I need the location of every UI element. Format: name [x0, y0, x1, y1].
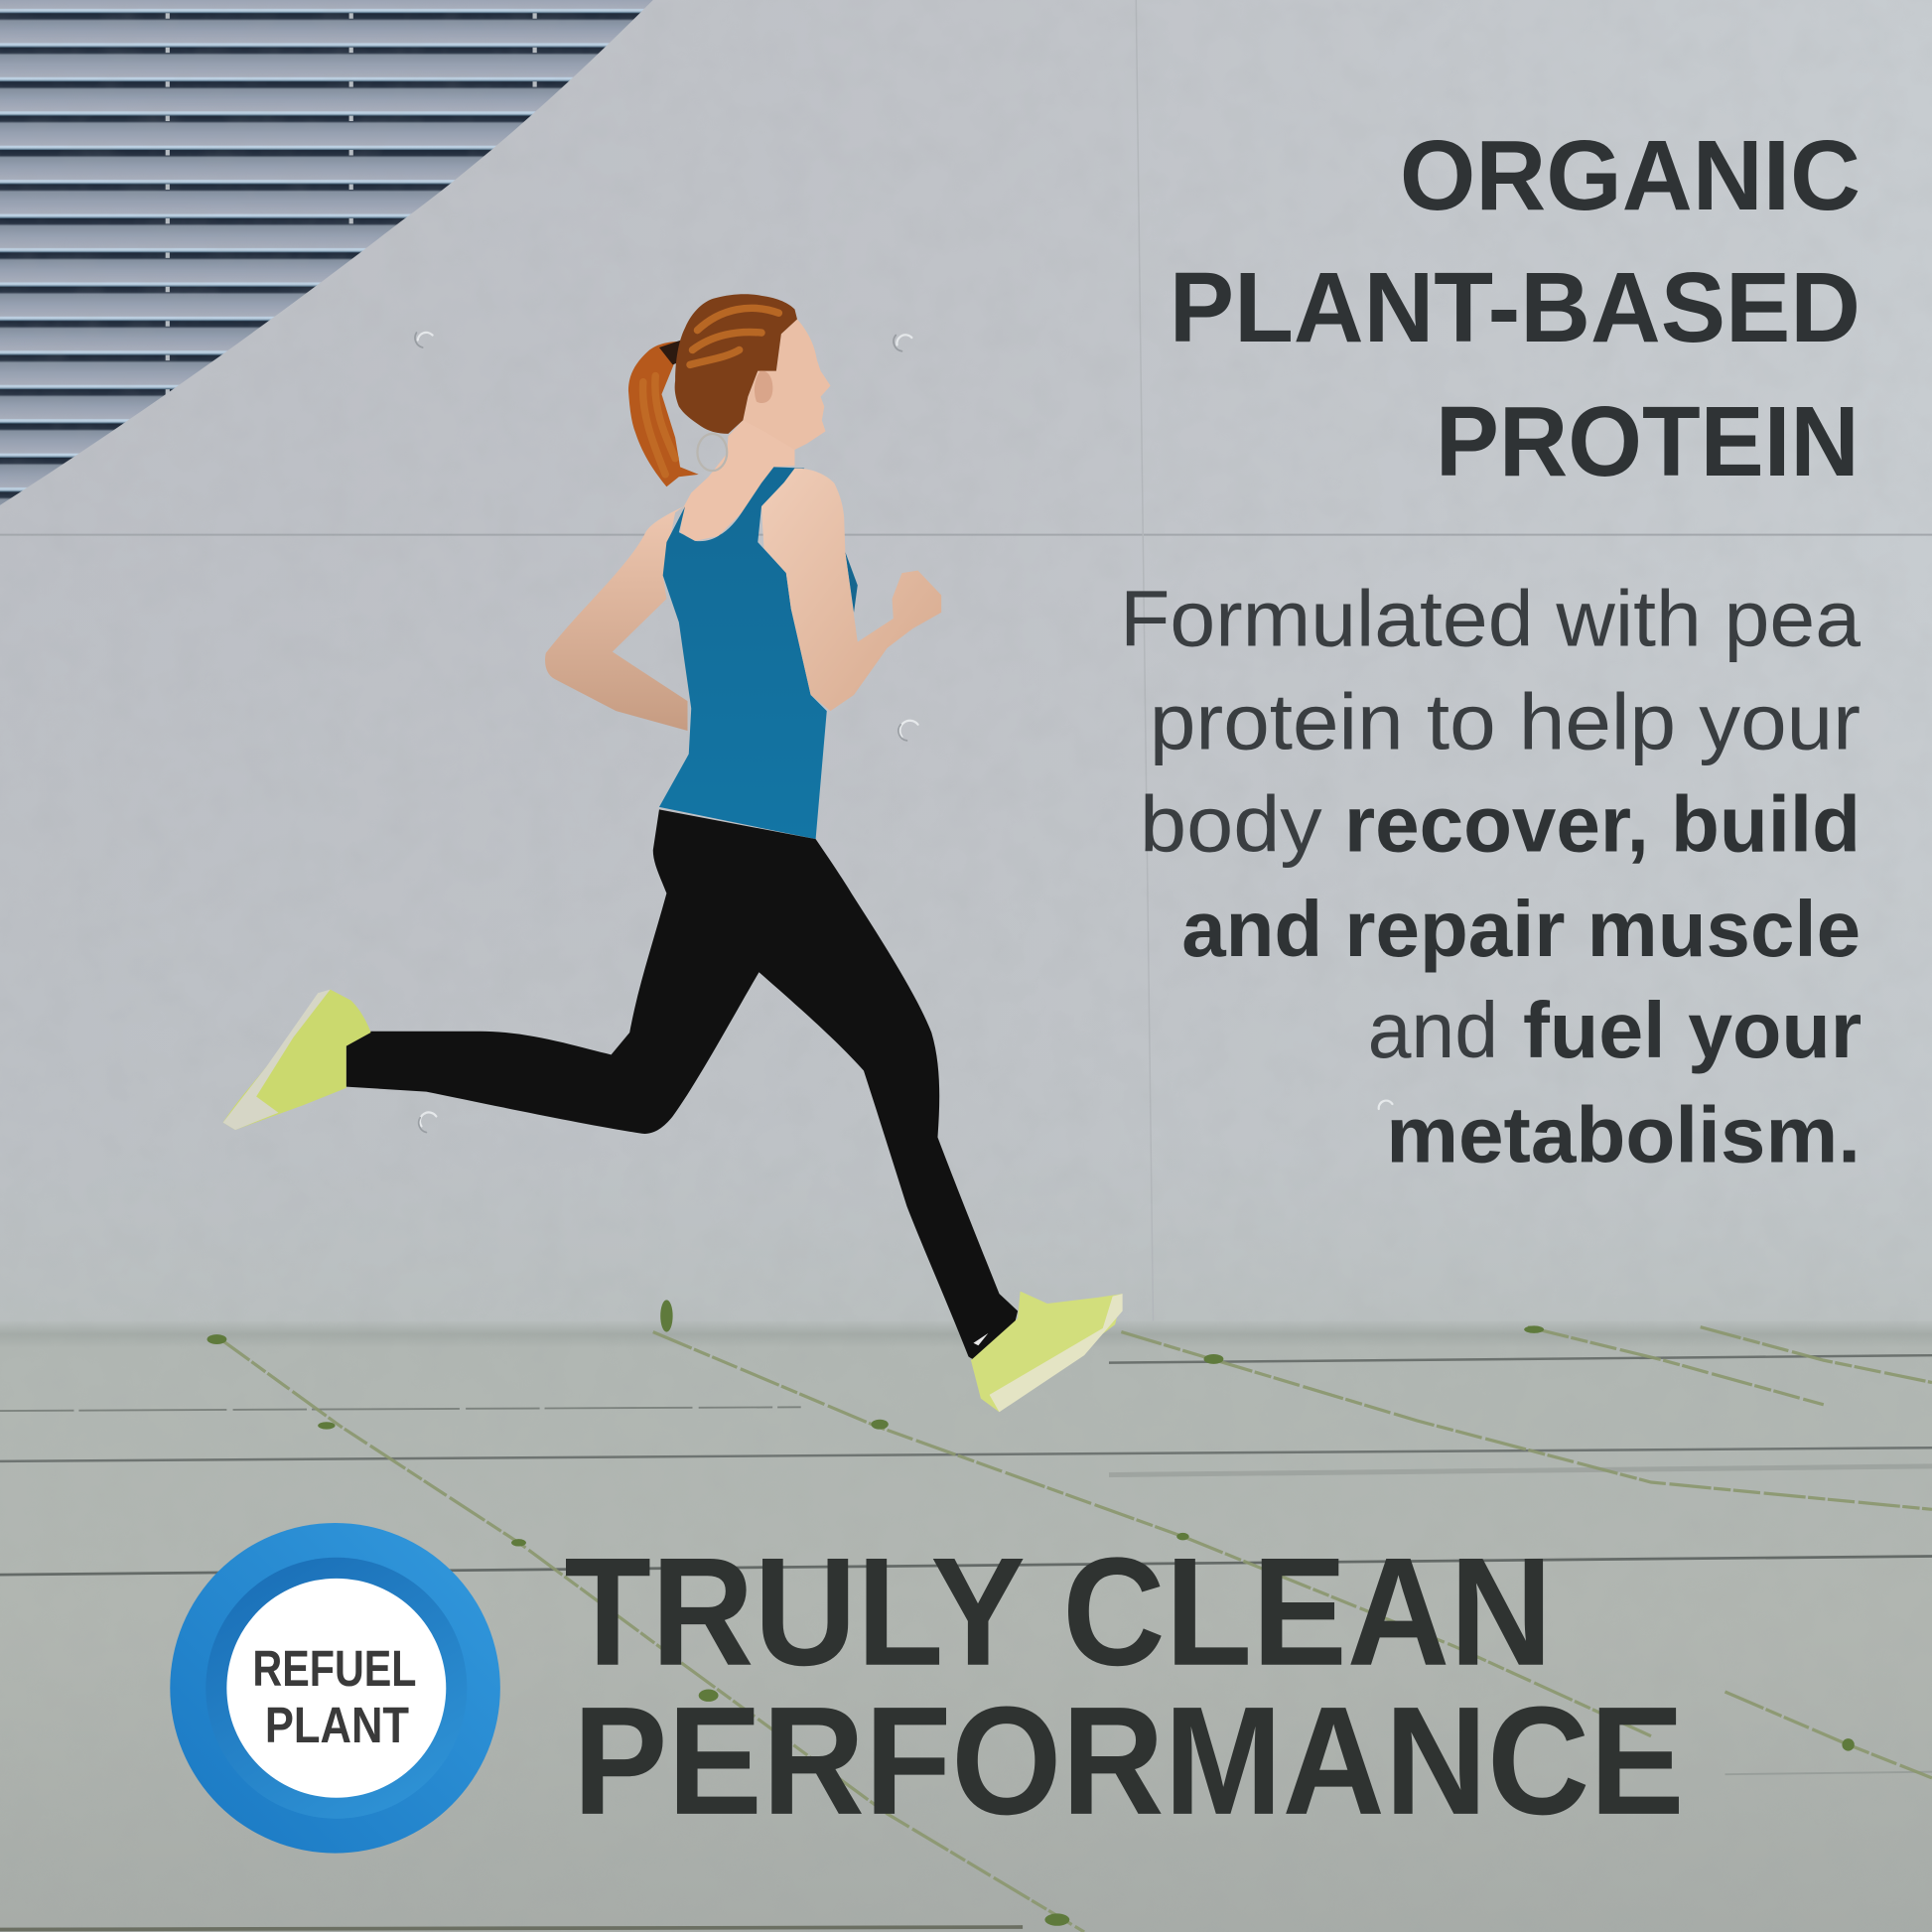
logo badge: REFUEL	[252, 1640, 416, 1697]
logo badge	[170, 1523, 500, 1854]
tank top front sliver	[845, 552, 858, 613]
back shoe	[223, 990, 371, 1130]
face	[743, 319, 830, 450]
back arm	[545, 506, 688, 731]
body text: Formulated with pea	[1120, 574, 1862, 662]
wall seams and tie holes	[0, 0, 1932, 1330]
pavement	[0, 1320, 1932, 1932]
front shoe	[971, 1292, 1123, 1412]
body text: protein to help your	[1150, 678, 1861, 766]
wall shading	[0, 542, 1932, 1343]
neck and shoulders	[680, 419, 794, 541]
hair bun	[675, 294, 797, 434]
tagline: TRULY CLEAN	[564, 1526, 1553, 1698]
swoosh	[973, 1333, 988, 1345]
heading: PROTEIN	[1436, 386, 1860, 497]
tagline: PERFORMANCE	[573, 1675, 1685, 1847]
tank top	[659, 467, 827, 839]
logo badge: PLANT	[265, 1697, 409, 1753]
hair highlights	[643, 308, 778, 475]
body text: and	[1368, 986, 1498, 1074]
pavement joints	[0, 1300, 1932, 1932]
earring	[697, 434, 727, 471]
leggings	[346, 809, 1018, 1361]
runner	[223, 294, 1123, 1412]
back shoe sole	[223, 990, 331, 1130]
ponytail	[628, 342, 699, 486]
front shoe sole	[990, 1294, 1123, 1412]
body text: metabolism.	[1386, 1090, 1861, 1178]
body text	[1120, 574, 1862, 1178]
body text: fuel your	[1523, 986, 1862, 1074]
heading: ORGANIC	[1400, 120, 1861, 231]
heading	[1170, 120, 1861, 497]
heading: PLANT-BASED	[1170, 252, 1861, 363]
body text: recover, build	[1344, 780, 1861, 869]
window blinds	[0, 0, 690, 530]
tagline	[564, 1526, 1685, 1847]
ear	[755, 370, 772, 403]
hair tie	[659, 339, 685, 364]
concrete wall	[0, 0, 1932, 1349]
blind vertical rails	[168, 13, 535, 407]
body text: body	[1140, 780, 1322, 869]
body text: and repair muscle	[1181, 885, 1861, 973]
near arm	[761, 469, 941, 711]
